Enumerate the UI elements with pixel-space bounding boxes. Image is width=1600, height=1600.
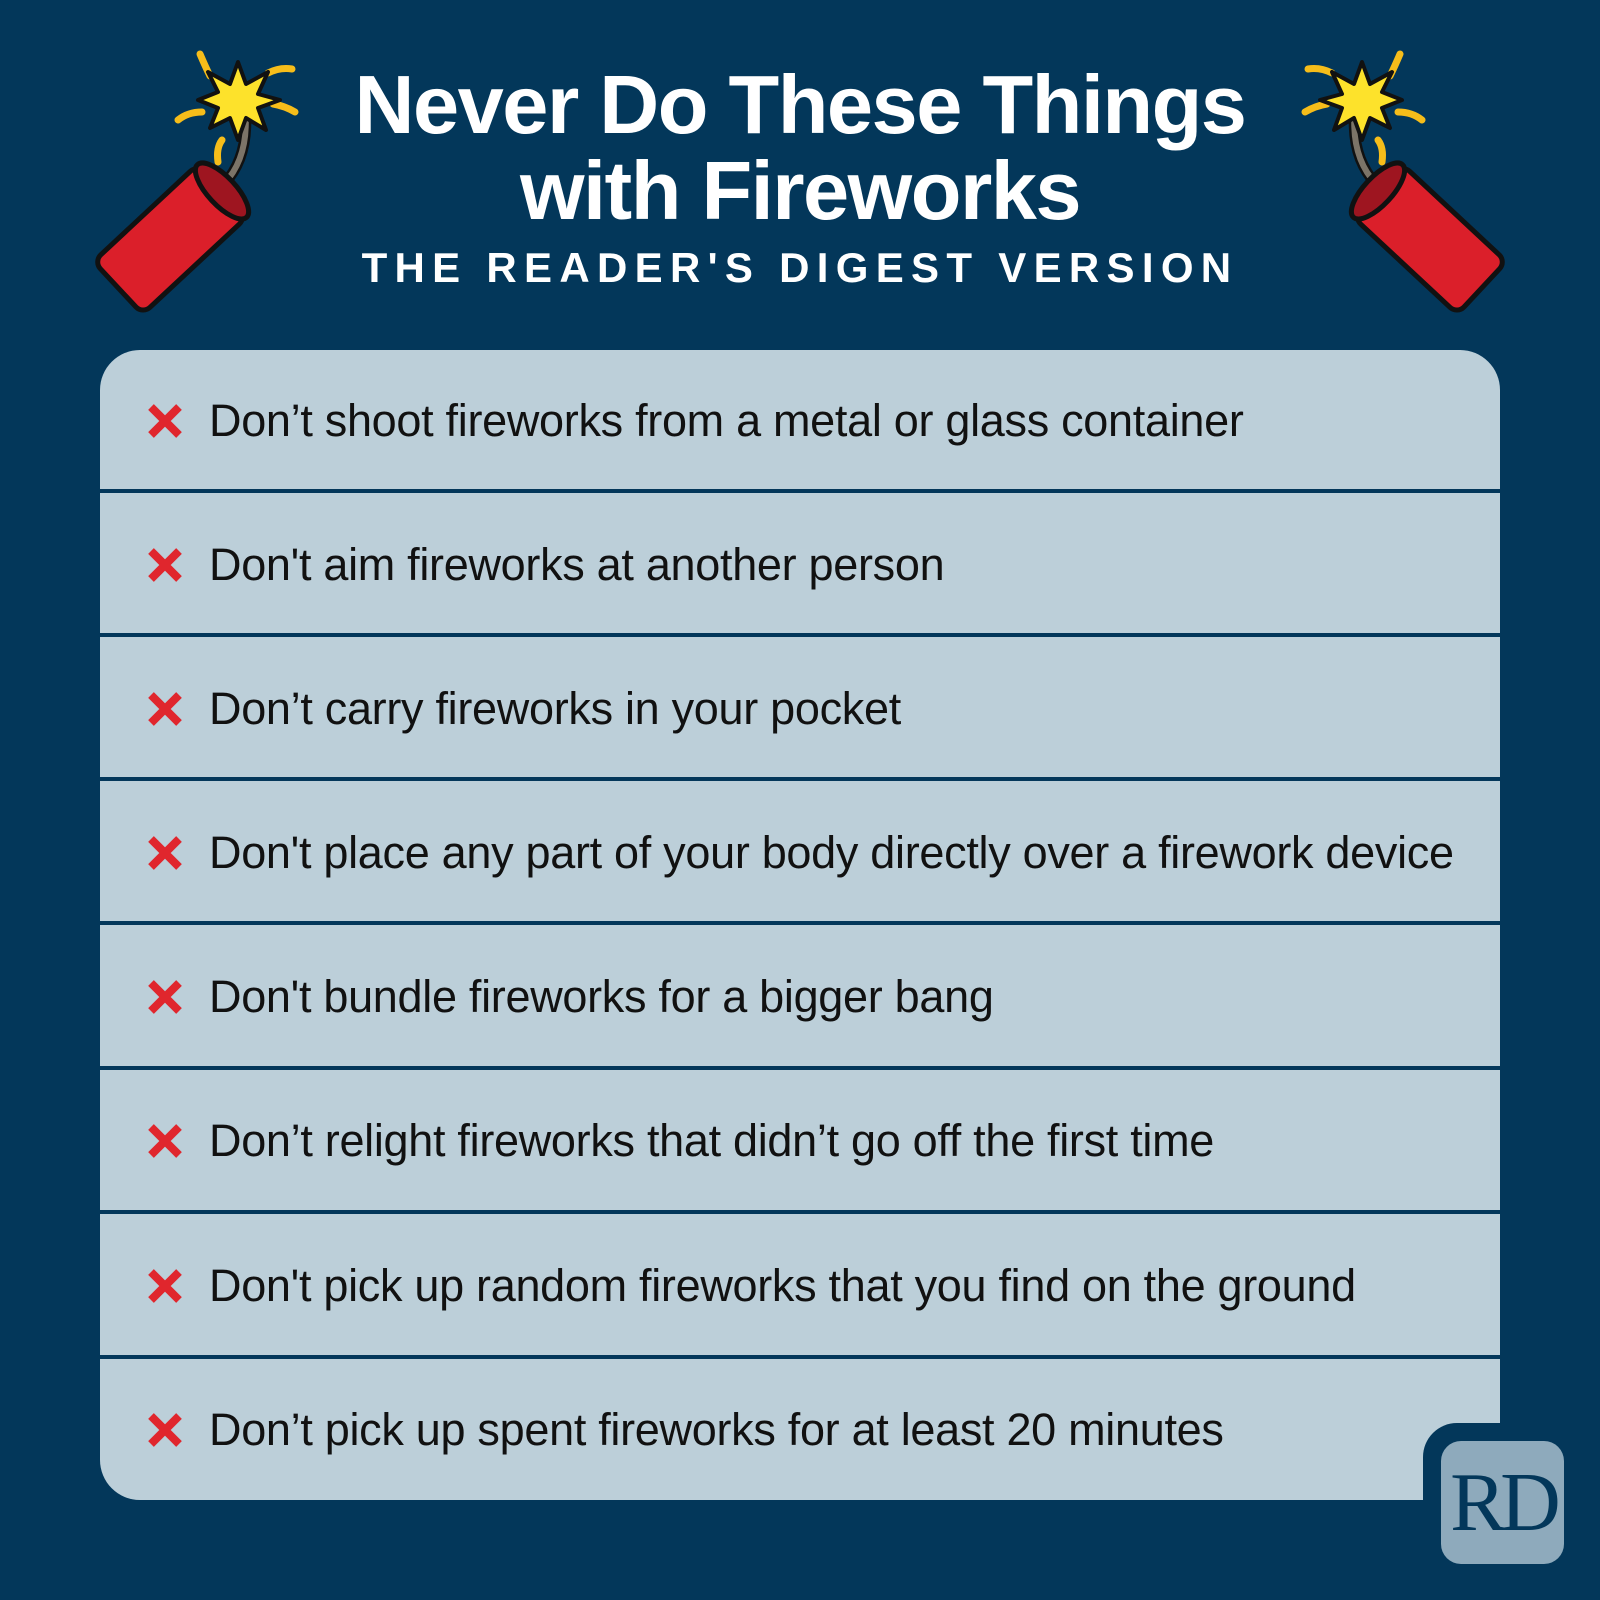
row 8: Don’t pick up spent fireworks for at least 20 minutes [209,1404,1224,1454]
icon: firecracker right [1305,54,1506,314]
row 7: Don't pick up random fireworks that you find on the ground [209,1260,1356,1310]
subtitle: THE READER'S DIGEST VERSION [362,244,1238,291]
row 5: Don't bundle fireworks for a bigger bang [209,970,994,1022]
row 4: Don't place any part of your body directly over a firework device [209,826,1454,878]
title: Never Do These Things [355,58,1245,151]
title [355,58,1245,237]
icon: firecracker left [95,50,1505,312]
logo: RD: RD [1450,1456,1555,1549]
panel: list of don'ts [100,350,1500,1500]
logo: RD [1423,1423,1600,1600]
title: with Fireworks [520,144,1080,237]
row 1: Don’t shoot fireworks from a metal or glass container [209,394,1244,446]
row 3: Don’t carry fireworks in your pocket [209,682,901,734]
row 6: Don’t relight fireworks that didn’t go off the first time [209,1114,1214,1166]
row 2: Don't aim fireworks at another person [209,538,944,590]
